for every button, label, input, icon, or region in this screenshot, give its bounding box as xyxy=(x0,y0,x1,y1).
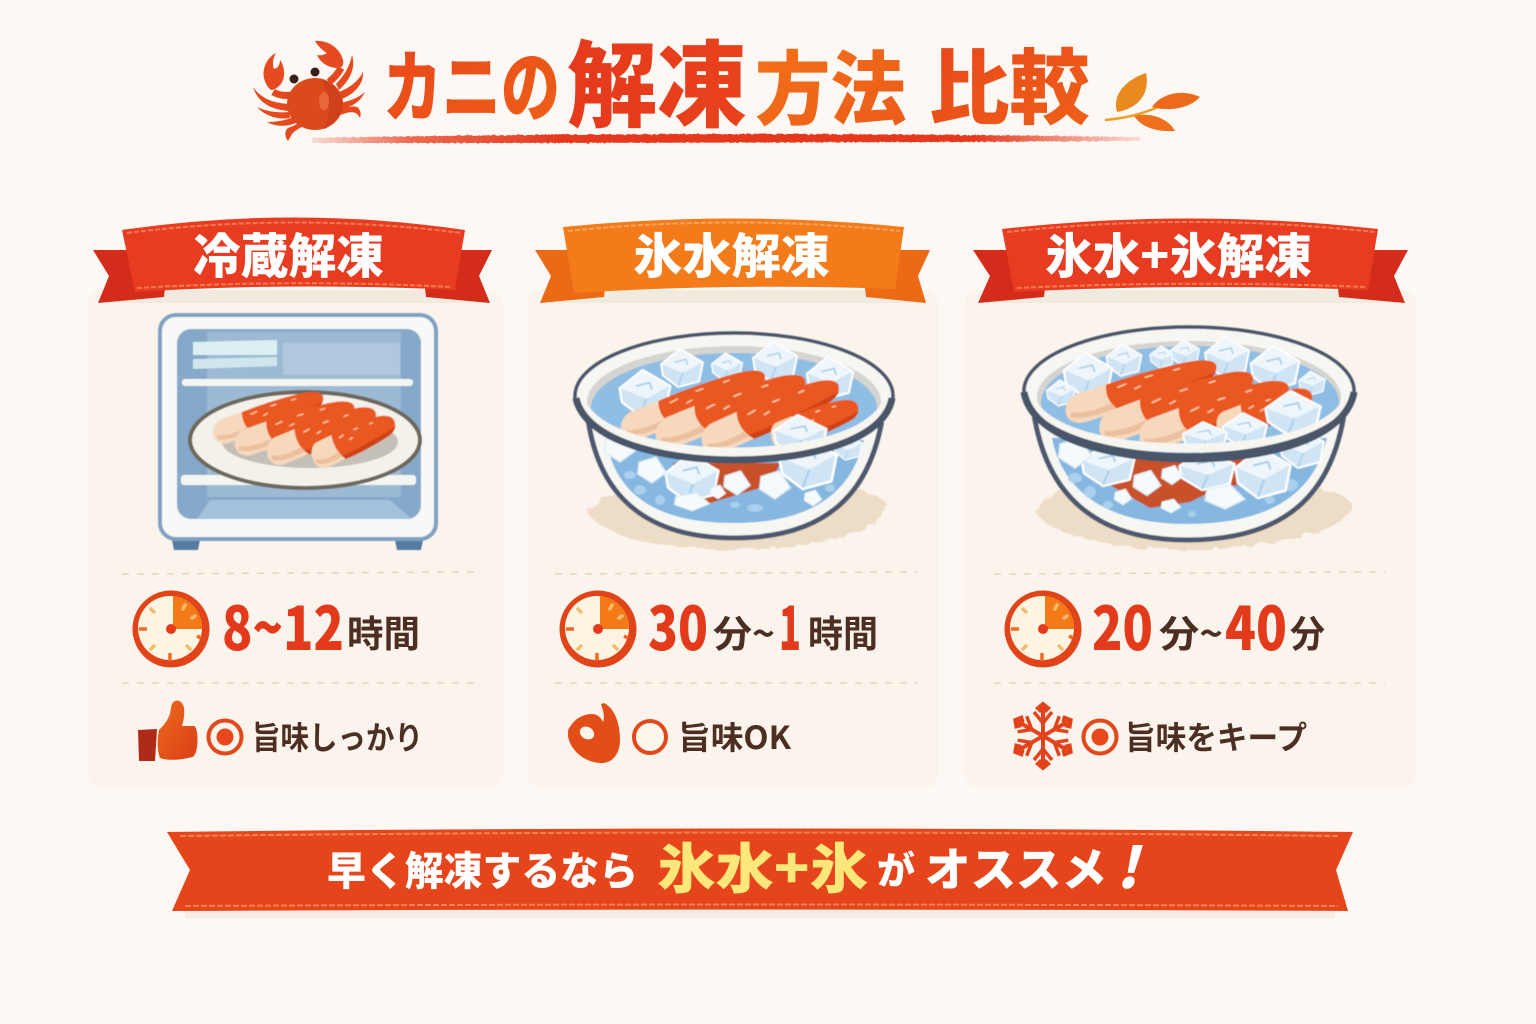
time value: 1 xyxy=(779,581,801,668)
divider xyxy=(555,682,918,684)
icon: thumbs up xyxy=(138,700,198,761)
time value: 時間 xyxy=(347,604,420,658)
taste row xyxy=(568,703,792,763)
illustration: glass bowl with extra ice and crab xyxy=(1024,327,1354,550)
time value: 分~ xyxy=(1159,604,1223,658)
taste row xyxy=(1009,702,1307,770)
panel background xyxy=(527,290,938,788)
panel: ice water thawing xyxy=(527,217,938,788)
panel background xyxy=(965,290,1416,788)
taste text: 旨味OK xyxy=(678,713,792,759)
banner ribbon xyxy=(167,828,1353,911)
banner text: ! xyxy=(1112,824,1154,905)
panel: ice water plus ice thawing xyxy=(965,217,1416,788)
title text: 方法 xyxy=(755,26,906,142)
bottom recommendation banner xyxy=(167,824,1353,918)
divider xyxy=(555,572,918,574)
icon: clock xyxy=(132,590,210,668)
time row xyxy=(560,581,878,668)
ribbon heading: 氷水+氷解凍 xyxy=(1045,217,1312,287)
banner text: が xyxy=(877,840,915,895)
ribbon heading: 氷水解凍 xyxy=(633,217,830,287)
title text: 比較 xyxy=(929,22,1090,141)
banner text xyxy=(327,824,1154,905)
time row xyxy=(1004,581,1325,668)
time value: 時間 xyxy=(808,604,878,658)
time value xyxy=(648,581,878,668)
divider xyxy=(122,572,476,574)
title text xyxy=(383,11,1090,147)
title underline xyxy=(312,134,1140,143)
illustration: refrigerator with crab on plate xyxy=(160,315,436,550)
time row xyxy=(132,581,420,668)
banner shadow xyxy=(185,908,1335,918)
banner text: オススメ xyxy=(925,834,1107,900)
time value: 分~ xyxy=(713,604,775,658)
icon: clock xyxy=(560,590,636,668)
illustration: glass bowl with ice water and crab xyxy=(575,333,893,550)
icon: clock xyxy=(1004,590,1082,668)
taste row xyxy=(138,700,423,761)
banner text: 早く解凍するなら xyxy=(327,839,638,897)
divider xyxy=(994,572,1385,574)
time value: 40 xyxy=(1225,581,1287,668)
ribbon heading xyxy=(535,217,930,303)
time value xyxy=(1092,581,1325,668)
title text: 解凍 xyxy=(567,11,747,147)
ribbon shadow xyxy=(985,290,1395,303)
ribbon shadow xyxy=(105,290,485,303)
rating mark: circle xyxy=(634,721,666,753)
icon: OK hand xyxy=(568,703,620,763)
banner stitching xyxy=(180,832,1340,906)
rating mark: double circle xyxy=(208,720,242,754)
time value: 分 xyxy=(1290,604,1325,658)
divider xyxy=(122,682,476,684)
icon: leaves xyxy=(1105,73,1200,131)
time value: 8~12 xyxy=(222,581,344,668)
ribbon heading xyxy=(93,217,492,303)
ribbon heading: 冷蔵解凍 xyxy=(193,217,384,287)
panel background xyxy=(88,290,503,788)
divider xyxy=(994,682,1385,684)
panel: refrigerator thawing xyxy=(88,217,503,788)
title block xyxy=(253,11,1200,147)
ribbon shadow xyxy=(545,290,920,303)
time value: 20 xyxy=(1092,581,1153,668)
time value: 30 xyxy=(648,581,708,668)
icon: snowflake xyxy=(1009,702,1077,770)
banner text: 氷水+氷 xyxy=(657,825,868,904)
ribbon heading xyxy=(973,217,1408,303)
rating mark: double circle xyxy=(1084,720,1116,754)
taste text: 旨味しっかり xyxy=(252,713,423,759)
icon: crab xyxy=(253,41,365,141)
taste text: 旨味をキープ xyxy=(1125,713,1307,759)
title text: カニの xyxy=(383,26,560,138)
